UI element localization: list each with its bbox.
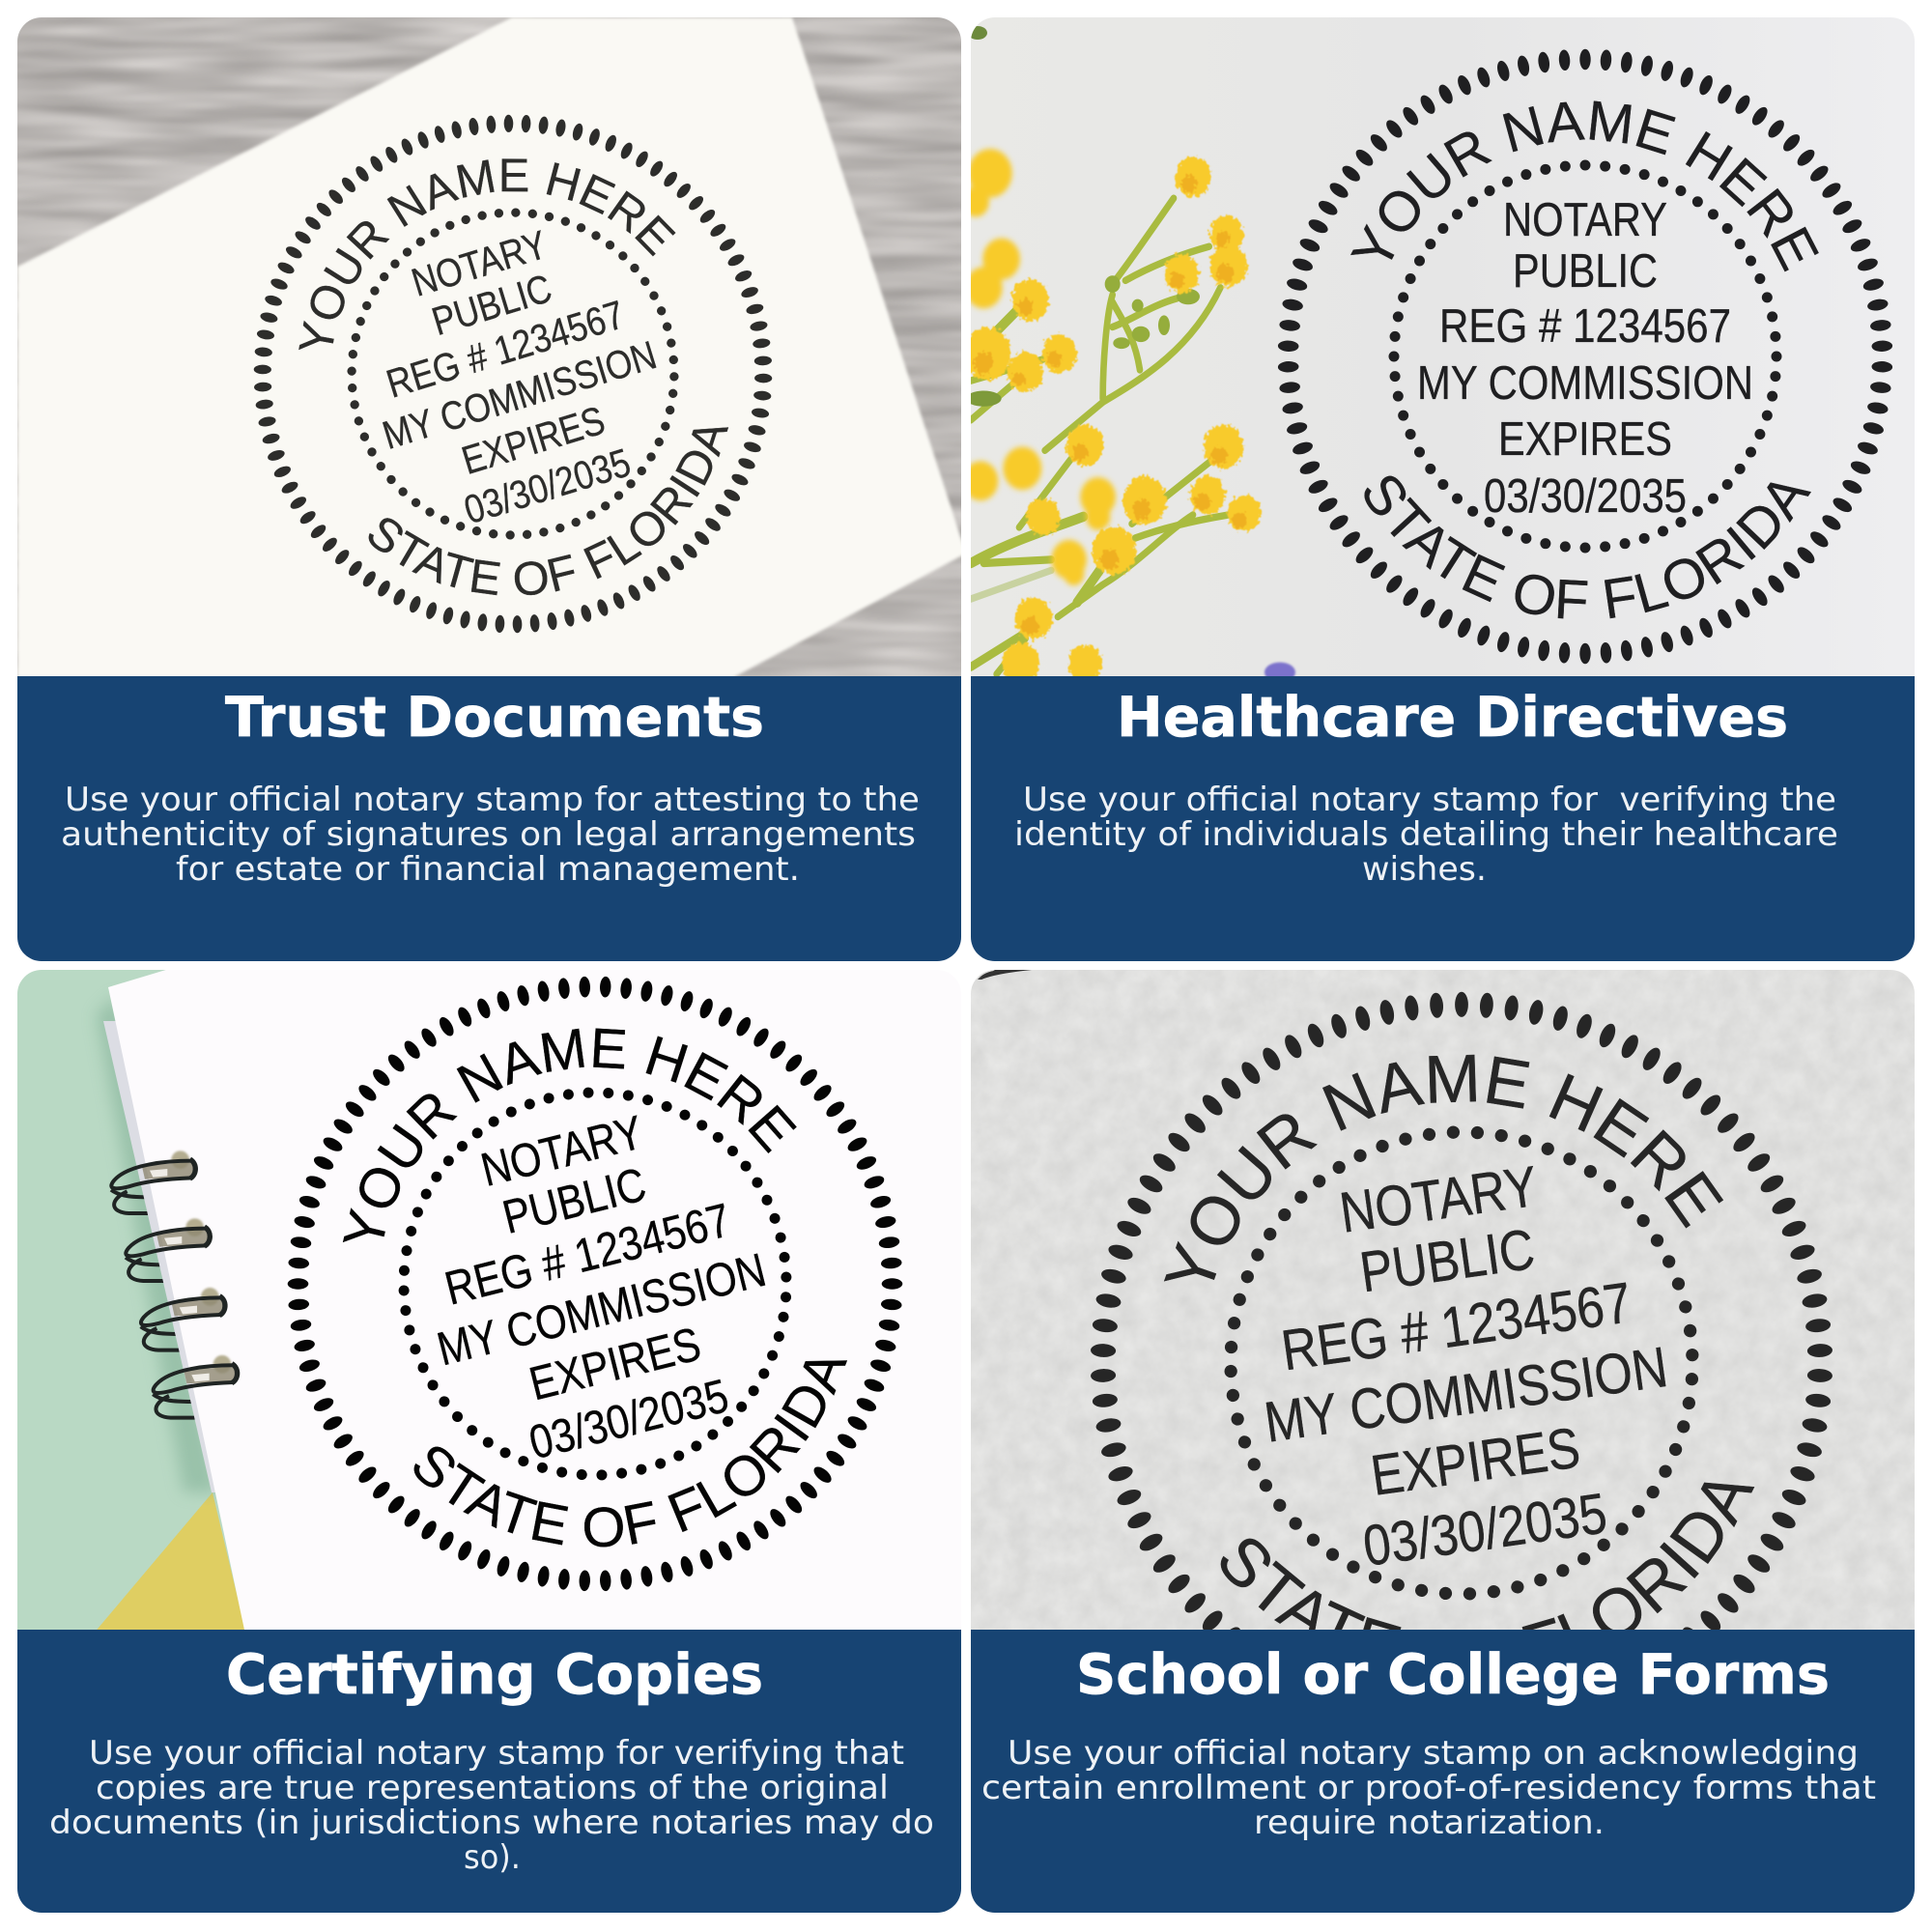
description: Use your official notary stamp for attesting to the (65, 781, 920, 819)
description: identity of individuals detailing their healthcare (1014, 815, 1838, 854)
description: Use your official notary stamp for verifying that (89, 1734, 904, 1773)
stamp: Trust Documents: STATE OF FLORIDA (369, 427, 728, 595)
photo: spiral notebook on mint and yellow paper (17, 970, 244, 1630)
heading: Certifying Copies (226, 1643, 763, 1707)
stamp: Healthcare Directives: NOTARY (1503, 194, 1667, 246)
heading: Healthcare Directives (1117, 686, 1788, 750)
stamp: Trust Documents: NOTARY (407, 222, 552, 305)
caption band (971, 1630, 1915, 1913)
stamp: Healthcare Directives (1277, 48, 1893, 665)
stamp: Trust Documents: YOUR NAME HERE (298, 158, 676, 350)
stamp: School or College Forms: REG # 1234567 (1277, 1269, 1635, 1382)
panel: Certifying Copies (17, 970, 961, 1913)
panel: Healthcare Directives (971, 17, 1915, 961)
stamp: School or College Forms: 03/30/2035 (1359, 1480, 1610, 1578)
photo: textured paper (971, 970, 1915, 1636)
stamp: Certifying Copies: REG # 1234567 (440, 1194, 736, 1316)
description: wishes. (1362, 850, 1487, 889)
caption band (17, 676, 961, 961)
stamp: Healthcare Directives: 03/30/2035 (1484, 470, 1687, 523)
panel: School or College Forms (971, 970, 1915, 1913)
description: Use your official notary stamp on acknowledging (1008, 1734, 1859, 1773)
description: Use your official notary stamp for verifying the (1023, 781, 1836, 819)
stamp: Trust Documents (253, 114, 773, 634)
description: copies are true representations of the original (96, 1769, 889, 1807)
description (61, 781, 920, 889)
stamp: School or College Forms: MY COMMISSION (1261, 1334, 1671, 1455)
stamp: Trust Documents: MY COMMISSION (378, 332, 662, 458)
stamp: Certifying Copies (288, 976, 902, 1592)
stamp: Trust Documents: 03/30/2035 (459, 440, 636, 532)
description (981, 1734, 1876, 1842)
stamp: Certifying Copies: YOUR NAME HERE (342, 1028, 797, 1242)
stamp: School or College Forms: YOUR NAME HERE (1163, 1055, 1723, 1281)
description: authenticity of signatures on legal arrangements (61, 815, 916, 854)
stamp: Certifying Copies: EXPIRES (525, 1318, 706, 1410)
stamp: Certifying Copies: NOTARY (476, 1106, 648, 1197)
stamp: Certifying Copies: PUBLIC (497, 1158, 651, 1244)
photo: card on grey fabric (17, 17, 966, 684)
stamp: Healthcare Directives: PUBLIC (1513, 245, 1658, 298)
stamp: Trust Documents: REG # 1234567 (382, 292, 630, 407)
heading: School or College Forms (1076, 1643, 1830, 1707)
stamp: Trust Documents: PUBLIC (427, 266, 556, 344)
stamp: School or College Forms (1091, 991, 1833, 1630)
stamp: School or College Forms: EXPIRES (1367, 1414, 1584, 1508)
stamp: Trust Documents: EXPIRES (457, 398, 610, 483)
description: require notarization. (1254, 1804, 1605, 1842)
stamp: Healthcare Directives: EXPIRES (1498, 413, 1672, 466)
stamp: Healthcare Directives: STATE OF FLORIDA (1364, 475, 1811, 618)
stamp: Certifying Copies: STATE OF FLORIDA (413, 1360, 848, 1548)
stamp: School or College Forms: STATE OF FLORIDA (1221, 1482, 1754, 1630)
stamp: School or College Forms: PUBLIC (1356, 1216, 1538, 1304)
description: for estate or financial management. (176, 850, 800, 889)
caption band (971, 676, 1915, 961)
description (49, 1734, 934, 1877)
description (1017, 785, 1837, 881)
description: certain enrollment or proof-of-residency forms that (981, 1769, 1876, 1807)
description: documents (in jurisdictions where notaries may do (49, 1804, 934, 1842)
stamp: Healthcare Directives: REG # 1234567 (1439, 300, 1731, 353)
stamp: Healthcare Directives: YOUR NAME HERE (1350, 100, 1819, 272)
heading: Trust Documents (225, 686, 764, 750)
description: so). (464, 1838, 521, 1877)
stamp: Healthcare Directives: MY COMMISSION (1417, 357, 1753, 410)
stamp: Certifying Copies: MY COMMISSION (432, 1244, 771, 1376)
photo: yellow flowers on pale wall (962, 17, 1915, 684)
caption band (17, 1630, 961, 1913)
stamp: School or College Forms: NOTARY (1336, 1153, 1541, 1245)
panel: Trust Documents (17, 17, 961, 961)
stamp: Certifying Copies: 03/30/2035 (525, 1370, 733, 1469)
